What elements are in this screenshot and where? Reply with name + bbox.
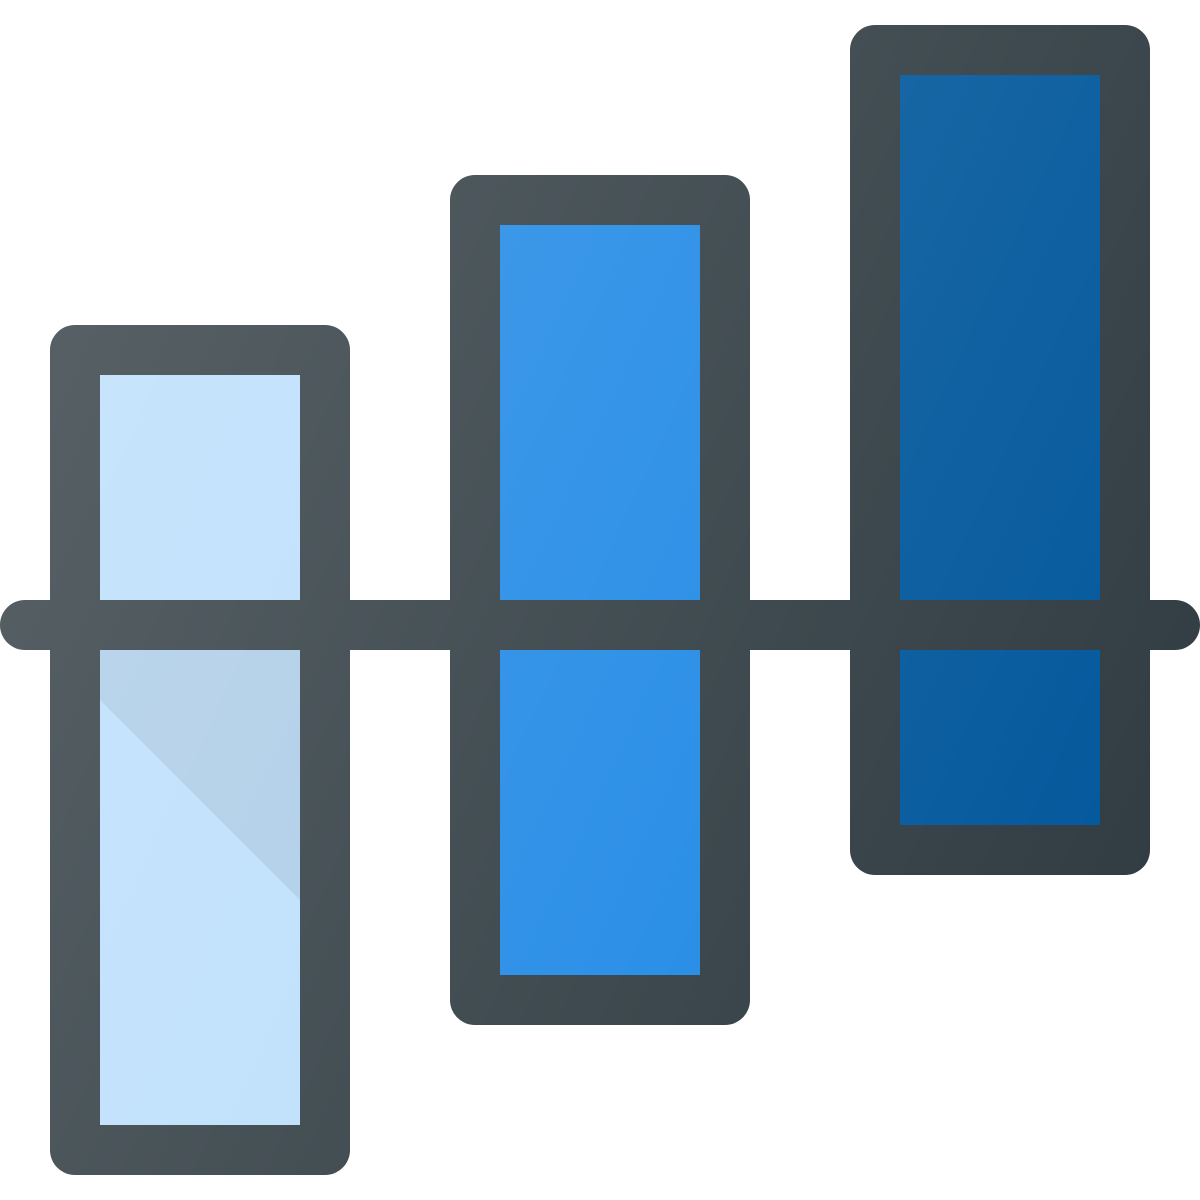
shadow under center line: [100, 650, 300, 900]
middle bar: [450, 175, 750, 1025]
horizontal center line: [0, 600, 1200, 650]
right bar: [850, 25, 1150, 875]
left bar: [50, 325, 350, 1175]
